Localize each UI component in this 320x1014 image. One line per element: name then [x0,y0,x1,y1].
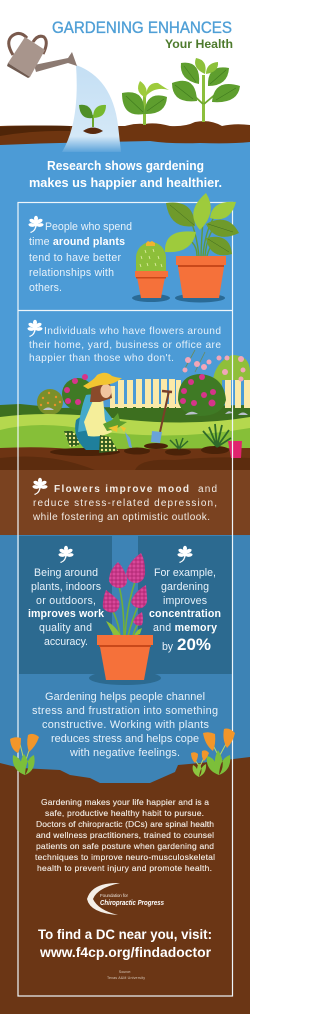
panel: flowers around home: their home, yard, business or office are [29,340,221,351]
panel: work quality: quality and [39,622,92,634]
icon: sprig [58,546,74,563]
soil strip [0,121,250,145]
logo: Foundation for Chiropractic Progress: Chiropractic Progress [100,898,164,907]
icon: orange flowers left [10,734,39,775]
garden scene [0,350,250,472]
panel: concentration and memory: improves [163,595,207,607]
panel: work quality: or outdoors, [36,595,96,607]
panel: flowers improve mood: while fostering an optimistic outlook. [32,512,210,523]
icon: sprig [27,320,43,337]
panel: concentration and memory: concentration [149,608,221,620]
panel: concentration and memory: and memory [153,622,217,634]
heading: research statement: makes us happier and healthier. [29,176,222,190]
panel: work quality: plants, indoors [31,581,101,593]
icon: potted leafy plant [165,193,239,302]
panel: work quality [28,546,104,648]
call to action: www.f4cp.org/findadoctor [39,945,212,960]
heading: research statement [29,159,222,190]
panel: around plants: time around plants [29,236,125,248]
text block: chiropractic: health to prevent injury and promote health. [37,863,212,873]
icon: orange flowers right [191,728,235,777]
outer frame [18,202,232,996]
icon: watering can [7,33,77,78]
panel: flowers improve mood: reduce stress-related depression, [33,498,217,509]
source: Texas A&M University [107,976,145,980]
panel: flowers around home: happier than those who don't. [29,353,174,364]
panel: flowers improve mood: and [198,484,217,495]
icon: pink pot [228,441,242,458]
text block: channel stress: Gardening helps people channel [45,691,205,703]
icon: hyacinth pot [89,553,161,685]
text block: channel stress: stress and frustration into something [32,705,218,717]
title: Your Health [165,37,233,51]
heading: research statement: Research shows gardening [47,159,204,173]
panel: around plants: others. [29,282,62,294]
source [107,970,145,980]
icon: gardener [64,373,132,453]
title: GARDENING ENHANCES [52,19,232,37]
icon: sprig [28,216,44,233]
panel: around plants: People who spend [45,221,132,233]
panel: around plants: relationships with [29,267,114,279]
page background bands [0,0,250,1014]
text block: channel stress: reduces stress and helps cope [51,733,199,745]
icon: sprig [177,546,193,563]
panel: concentration and memory: 20% [177,635,211,654]
panel: concentration and memory [149,546,221,654]
text block: chiropractic: Doctors of chiropractic (DCs) are spinal health [36,819,214,829]
logo: Foundation for Chiropractic Progress [87,883,164,915]
title [52,19,233,51]
fence [110,379,250,408]
text block: chiropractic [35,797,215,873]
water stream [62,65,121,152]
text block: chiropractic: safe, productive healthy habit to pursue. [45,808,204,818]
icon: spiky plants [170,424,231,449]
panel: concentration and memory: For example, [154,567,216,579]
panel: around plants [28,216,132,294]
icon: large plant [172,58,240,122]
text block: chiropractic: patients on safe posture when gardening and [36,841,214,851]
panel: work quality: improves work [28,608,104,620]
call to action: To find a DC near you, visit: [38,927,212,942]
panel: flowers improve mood: Flowers improve mood [54,484,189,495]
panel: flowers improve mood [32,478,217,523]
text block: chiropractic: Gardening makes your life happier and is a [41,797,209,807]
text block: channel stress: with negative feelings. [69,747,180,759]
panel: flowers around home [27,320,221,364]
icon: seedling [79,105,106,134]
icon: middle plant [122,81,169,125]
panel: concentration and memory: gardening [161,581,209,593]
icon: shovel [151,391,172,443]
call to action [38,927,212,960]
panel: concentration and memory: by [162,641,174,653]
panel: around plants: tend to have better [29,252,121,264]
panel: work quality: Being around [34,567,98,579]
logo: Foundation for Chiropractic Progress: Foundation for [100,893,128,898]
source: Source: [119,970,131,974]
icon: sprig [32,478,48,495]
panel: flowers around home: Individuals who have flowers around [44,326,221,337]
text block: chiropractic: techniques to improve neuro-musculoskeletal [35,852,215,862]
text block: channel stress: constructive. Working with plants [42,719,210,731]
text block: chiropractic: and wellness practitioners, trained to counsel [36,830,214,840]
text block: channel stress [32,691,218,759]
icon: cactus pot [132,241,170,302]
panel: work quality: accuracy. [44,636,88,648]
